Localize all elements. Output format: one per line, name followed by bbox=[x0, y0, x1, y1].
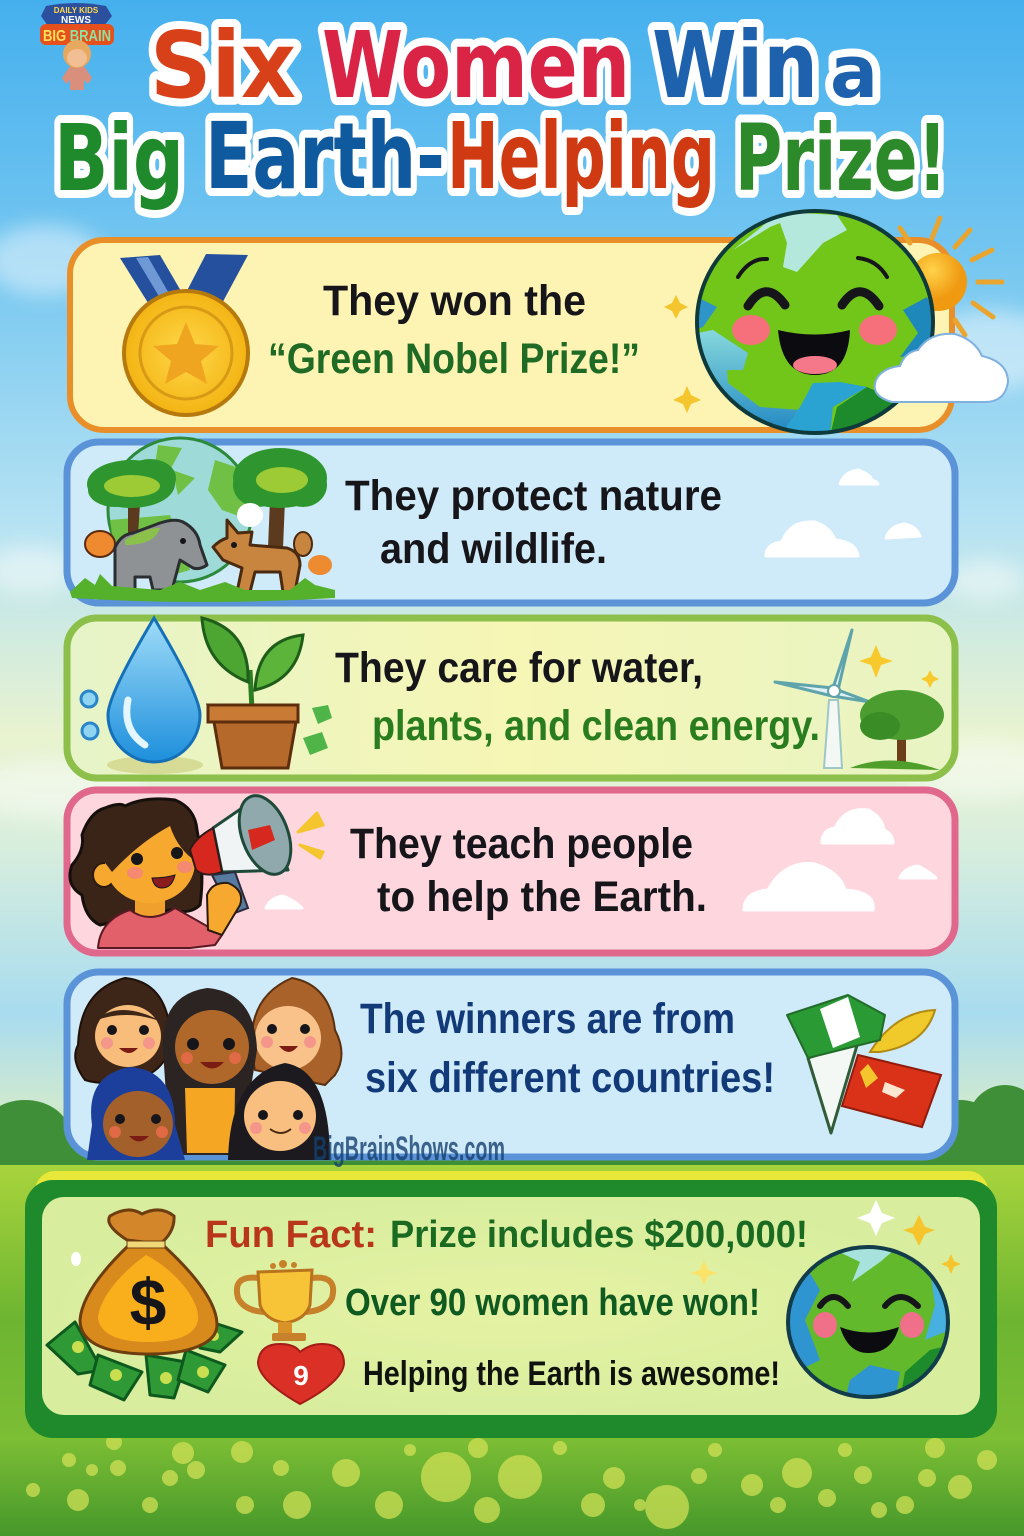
text: fun fact lines: Helping the Earth is awesome! bbox=[363, 1355, 780, 1393]
text: the winners are from six different countries: six different countries! bbox=[365, 1054, 775, 1102]
logo: Daily Kids News Big Brain: NEWS bbox=[61, 15, 91, 26]
icon: sparkles and star bbox=[71, 1200, 961, 1285]
panel: protect nature bbox=[67, 438, 955, 603]
text: they teach people to help the earth bbox=[350, 820, 707, 921]
text: the winners are from six different countries: The winners are from bbox=[360, 995, 735, 1043]
grass bbox=[70, 574, 335, 602]
icon: small smiling earth bbox=[785, 1243, 950, 1400]
logo: Daily Kids News Big Brain bbox=[40, 3, 114, 90]
title: Big bbox=[54, 105, 184, 212]
text: they care for water, plants, and clean energy: They care for water, bbox=[335, 644, 703, 692]
text: fun fact lines: Prize includes $200,000! bbox=[390, 1214, 808, 1256]
text: they protect nature and wildlife bbox=[345, 472, 722, 573]
watermark: BigBrainShows.com: BigBrainShows.com bbox=[313, 1130, 505, 1168]
title: a bbox=[830, 30, 878, 114]
icon: money bag with cash bbox=[47, 1210, 242, 1400]
logo: Daily Kids News Big Brain: DAILY KIDS bbox=[54, 6, 99, 15]
text: the winners are from six different countries bbox=[360, 995, 775, 1102]
panel: green nobel prize bbox=[70, 211, 1008, 436]
logo: Daily Kids News Big Brain: BIG BRAIN bbox=[43, 28, 111, 45]
panel: fun fact bbox=[25, 1171, 997, 1438]
text: fun fact lines bbox=[205, 1214, 808, 1393]
icon: sun bbox=[900, 218, 1002, 335]
text: they protect nature and wildlife: They protect nature bbox=[345, 472, 722, 520]
icon: water drop bbox=[81, 618, 203, 774]
icon: cloud bbox=[875, 334, 1008, 402]
person: brown hair left bbox=[75, 978, 170, 1083]
icon: girl bbox=[70, 799, 222, 948]
title: Earth- bbox=[205, 103, 445, 210]
person: blue head wrap front left bbox=[87, 1067, 185, 1160]
panel: winners from six countries bbox=[67, 972, 955, 1168]
icon: heart with number 9: 9 bbox=[293, 1360, 309, 1391]
icon: megaphone with hand bbox=[190, 789, 323, 935]
title: Win bbox=[652, 12, 818, 119]
icon: sparkles bbox=[664, 295, 701, 413]
deer bbox=[213, 520, 312, 592]
icon: money bag with cash: $ bbox=[130, 1265, 166, 1339]
icon: clouds bbox=[266, 810, 936, 910]
person: centre woman in yellow bbox=[163, 988, 257, 1155]
title: Women bbox=[322, 12, 630, 119]
icon: potted plant bbox=[202, 618, 332, 768]
person: curly auburn hair right bbox=[252, 978, 342, 1085]
icon: clouds bbox=[766, 470, 920, 556]
icon: trophy bbox=[237, 1260, 333, 1341]
text: they won the green nobel prize: “Green Nobel Prize!” bbox=[268, 335, 640, 383]
panel: teach people bbox=[67, 789, 955, 953]
icon: heart with number 9 bbox=[258, 1344, 344, 1404]
text: they won the green nobel prize bbox=[268, 277, 640, 383]
text: they teach people to help the earth: They teach people bbox=[350, 820, 693, 868]
icon: earth with trees and animals bbox=[70, 438, 335, 602]
text: fun fact lines: Fun Fact: bbox=[205, 1214, 377, 1256]
icon: smiling earth bbox=[695, 211, 936, 436]
icon: group of five women bbox=[75, 978, 341, 1160]
text: they teach people to help the earth: to help the Earth. bbox=[377, 873, 707, 921]
icon: wind turbine, tree and sparkles bbox=[775, 630, 944, 770]
elephant bbox=[115, 520, 207, 590]
panel: water, plants, energy bbox=[67, 618, 955, 778]
title: Helping bbox=[447, 103, 715, 210]
icon: gold medal bbox=[120, 254, 248, 415]
icon: flags bbox=[787, 995, 941, 1133]
text: they care for water, plants, and clean energy bbox=[335, 644, 820, 750]
title: Six bbox=[150, 12, 296, 119]
tree: left bbox=[87, 459, 176, 535]
text: they won the green nobel prize: They won the bbox=[323, 277, 586, 325]
title bbox=[54, 12, 947, 212]
text: they protect nature and wildlife: and wildlife. bbox=[380, 525, 607, 573]
person: black hair front right bbox=[228, 1063, 330, 1160]
text: fun fact lines: Over 90 women have won! bbox=[345, 1282, 760, 1324]
tree: right bbox=[233, 448, 327, 548]
text: they care for water, plants, and clean energy: plants, and clean energy. bbox=[372, 702, 820, 750]
